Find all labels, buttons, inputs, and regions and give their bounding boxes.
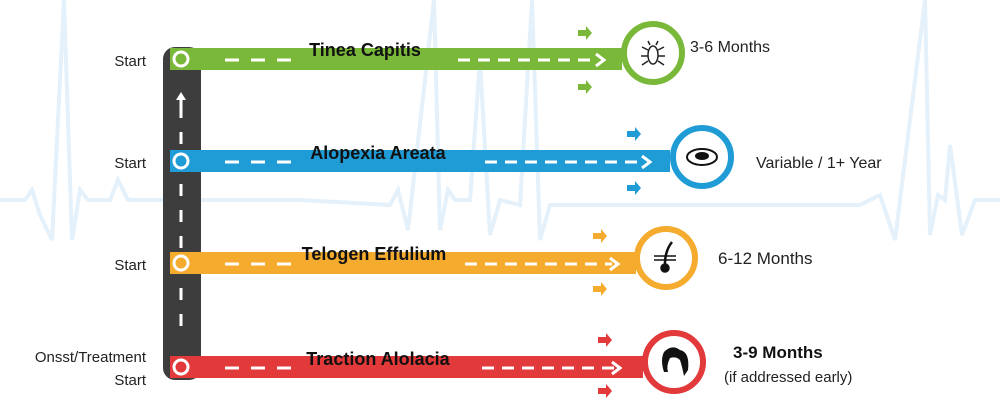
row: Traction Alolacia: 3-9 Months	[733, 343, 823, 362]
start labels: Start	[114, 257, 147, 274]
row: Traction Alolacia: Traction Alolacia	[306, 349, 451, 369]
start labels: Start	[114, 155, 147, 172]
row: Alopexia Areata: Variable / 1+ Year	[756, 155, 882, 172]
row: Tinea Capitis: Tinea Capitis	[309, 40, 421, 60]
start labels: Start	[114, 372, 147, 389]
row: Alopexia Areata: Alopexia Areata	[310, 143, 447, 163]
start labels: Onsst/Treatment	[35, 349, 147, 366]
start labels: Start	[114, 53, 147, 70]
row: Telogen Effulium: 6-12 Months	[718, 249, 812, 268]
row: Tinea Capitis	[170, 24, 770, 94]
row: Telogen Effulium: Telogen Effulium	[302, 244, 446, 264]
row: Alopexia Areata	[170, 127, 882, 195]
row: Tinea Capitis: 3-6 Months	[690, 39, 770, 56]
row: Telogen Effulium	[170, 229, 812, 296]
start labels	[35, 53, 147, 389]
row: Traction Alolacia: (if addressed early)	[724, 369, 852, 386]
vertical road	[163, 47, 201, 380]
row: Traction Alolacia	[170, 333, 852, 398]
